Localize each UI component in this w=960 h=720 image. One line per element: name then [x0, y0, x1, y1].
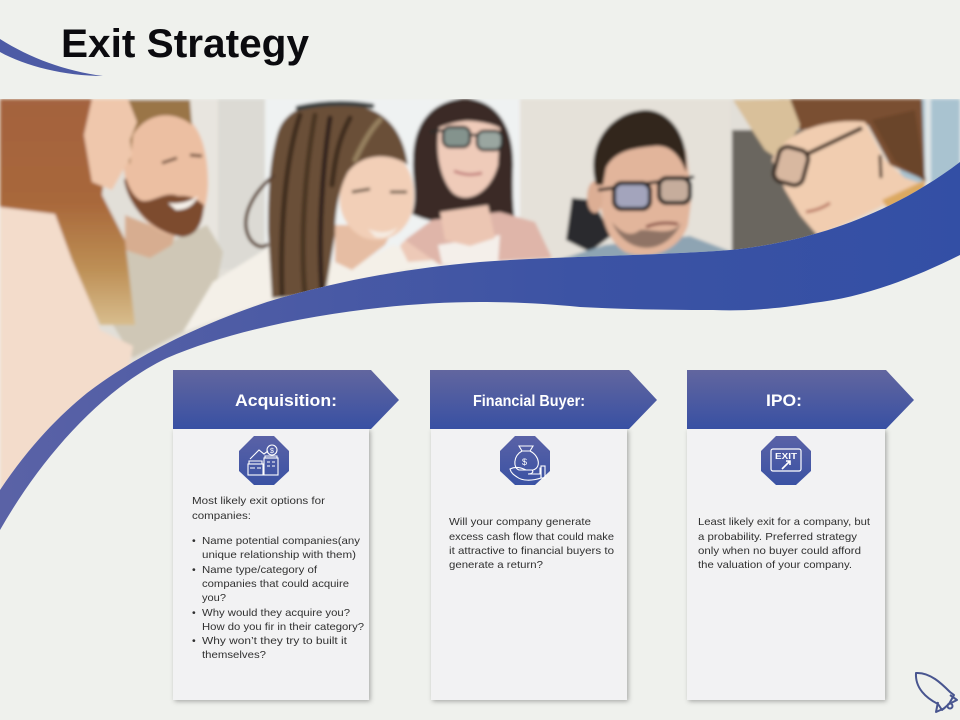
header arrow [173, 370, 399, 429]
heading: Financial Buyer: [473, 393, 585, 410]
icon: exit sign [761, 436, 811, 485]
icon: money bag in hand: $ [522, 457, 527, 467]
body text [192, 495, 364, 661]
body text: it attractive to financial buyers to [449, 545, 614, 557]
icon: money bag in hand [500, 436, 550, 485]
title: Exit Strategy [61, 22, 310, 66]
icon: buildings with dollar coin [239, 436, 289, 485]
panel: acquisition [173, 370, 399, 700]
card body [173, 429, 369, 700]
icon: exit sign: EXIT [775, 451, 798, 461]
body text: How do you fir in their category? [202, 621, 364, 633]
panel: ipo [687, 370, 914, 700]
person 3 [183, 248, 433, 332]
icon: rocket [916, 673, 957, 712]
body text: companies: [192, 510, 251, 522]
body text [698, 516, 870, 571]
body text: Least likely exit for a company, but [698, 516, 870, 528]
body text: you? [202, 592, 226, 604]
body text: the valuation of your company. [698, 559, 852, 571]
body text: generate a return? [449, 559, 543, 571]
body text: Why would they acquire you? [202, 607, 350, 619]
body text: Name type/category of [202, 564, 317, 576]
person 4 [412, 99, 515, 226]
corner swoosh [0, 39, 103, 76]
person 1 [0, 205, 133, 500]
card body [431, 429, 627, 700]
body text: • [192, 564, 196, 576]
header arrow [430, 370, 657, 429]
body text: companies that could acquire [202, 578, 349, 590]
body text: a probability. Preferred strategy [698, 531, 858, 543]
body text: only when no buyer could afford [698, 545, 861, 557]
photo: team around a table [0, 99, 960, 490]
body text: Most likely exit options for [192, 495, 326, 507]
person 6 [780, 99, 925, 180]
panel: financial buyer [430, 370, 657, 700]
body text: themselves? [202, 649, 266, 661]
card body [687, 429, 885, 700]
body text [449, 516, 614, 571]
body text: Will your company generate [449, 516, 591, 528]
icon: buildings with dollar coin: $ [270, 448, 274, 455]
body text: Why won’t they try to built it [202, 635, 347, 647]
body text: • [192, 535, 196, 547]
body text: Name potential companies(any [202, 535, 361, 547]
blue wave band [0, 162, 960, 530]
body text: unique relationship with them) [202, 549, 356, 561]
body text: • [192, 607, 196, 619]
heading: Acquisition: [235, 391, 337, 410]
person 5 [560, 234, 730, 258]
person 2 [110, 225, 223, 358]
body text: excess cash flow that could make [449, 531, 614, 543]
body text: • [192, 635, 196, 647]
heading: IPO: [766, 391, 802, 410]
camera [566, 198, 612, 252]
header arrow [687, 370, 914, 429]
